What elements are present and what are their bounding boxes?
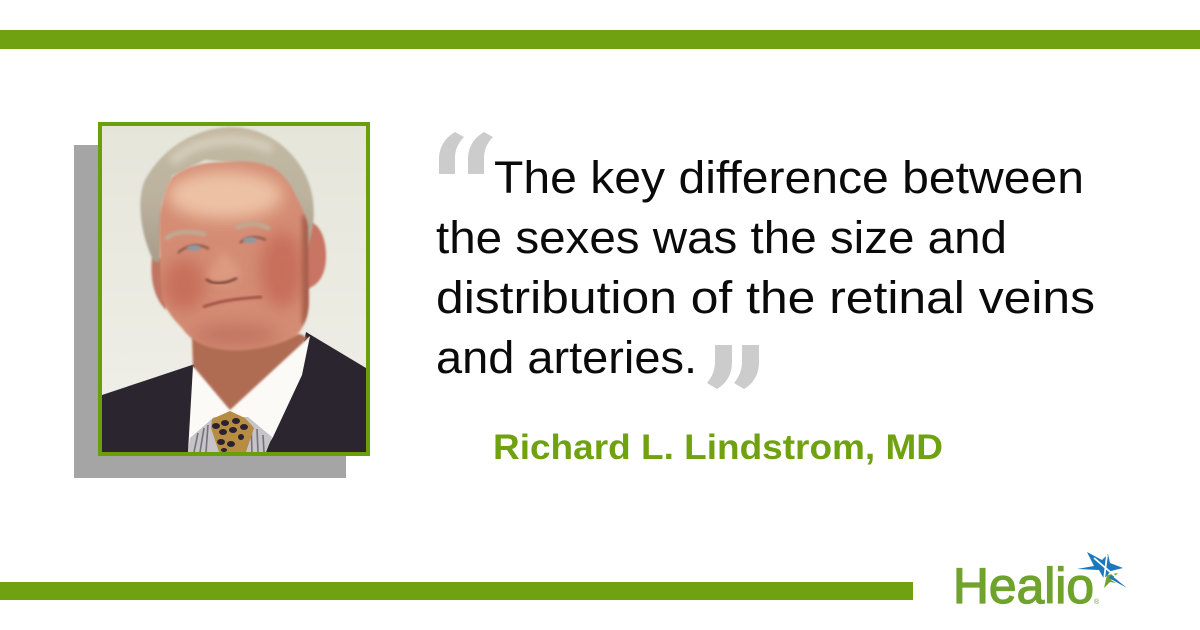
nose: [208, 255, 238, 281]
forehead light: [167, 171, 283, 219]
eyes: [187, 245, 201, 251]
hair: [140, 127, 314, 262]
hair highlight: [172, 140, 272, 162]
shirt and collar: [188, 336, 310, 452]
quote text: and arteries.: [436, 332, 697, 383]
right side shade: [302, 215, 312, 325]
bottom green bar: [0, 582, 913, 600]
gray offset shadow panel: [74, 145, 346, 478]
logo star blue: [1077, 552, 1123, 579]
quote text: distribution of the retinal veins: [436, 272, 1095, 323]
icon: closing quotation mark: [707, 345, 759, 389]
mouth: [203, 297, 262, 307]
left ear: [150, 258, 167, 310]
quote text: [436, 152, 1095, 383]
Healio logo: [953, 552, 1127, 614]
icon: opening quotation mark: [439, 132, 493, 174]
striped shirt front: [188, 417, 272, 452]
jacket: [102, 332, 366, 452]
cheeks: [162, 259, 206, 311]
registered mark: ®: [1094, 598, 1100, 606]
tie: [211, 411, 254, 452]
attribution name: Richard L. Lindstrom, MD: [493, 428, 943, 467]
logo wordmark: Healio: [953, 558, 1094, 614]
quote text: the sexes was the size and: [436, 212, 1007, 263]
quote text: The key difference between: [494, 152, 1084, 203]
chin shade: [191, 323, 279, 347]
logo star spark: [1094, 555, 1116, 580]
right ear: [307, 222, 328, 290]
portrait photo with green frame: [100, 124, 368, 454]
eye sockets: [178, 237, 266, 253]
top green bar: [0, 30, 1200, 49]
logo star tail: [1109, 575, 1127, 588]
logo star green: [1104, 573, 1118, 588]
face: [159, 160, 310, 351]
eyebrows: [167, 224, 268, 238]
neck: [192, 334, 308, 410]
